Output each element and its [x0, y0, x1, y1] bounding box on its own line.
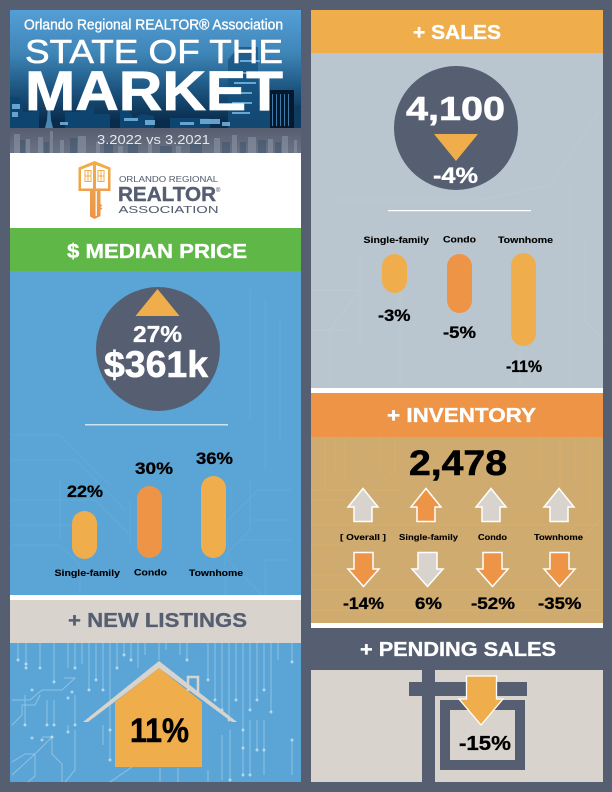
panel: new listings	[10, 600, 301, 782]
inventory type labels: [ Overall ]	[340, 532, 386, 542]
inventory heading: + INVENTORY	[387, 405, 537, 427]
inventory percent values: 6%	[415, 595, 442, 613]
median price heading	[10, 228, 301, 271]
pending sales heading: + PENDING SALES	[360, 639, 556, 661]
bar chart: sales by type: -11%	[506, 357, 542, 376]
percent change: 27%	[133, 321, 182, 347]
inventory percent values: -35%	[538, 595, 582, 613]
bar chart: sales by type: Single-family	[364, 235, 430, 246]
bar chart: median price by type: Condo	[134, 568, 167, 578]
bar chart: median price by type: Single-family	[54, 568, 121, 579]
inventory value: 2,478	[409, 444, 507, 483]
bar chart: sales by type: -5%	[443, 323, 476, 342]
sales percent change: -4%	[433, 163, 478, 188]
icon: house with new listings value: 11%	[130, 712, 189, 750]
logo wordmark: REALTOR	[118, 183, 216, 206]
median price heading: $ MEDIAN PRICE	[67, 241, 247, 263]
icon: down arrows	[348, 552, 575, 586]
sales background	[311, 53, 603, 388]
city skyline	[10, 47, 301, 128]
inventory percent values: -52%	[471, 595, 515, 613]
inventory type labels: Single-family	[399, 532, 458, 542]
inventory percent values	[343, 595, 582, 613]
bar chart: sales by type: -3%	[378, 306, 410, 325]
bar chart: sales by type: Townhome	[498, 235, 553, 246]
bar chart: median price by type	[54, 449, 243, 579]
logo panel	[10, 153, 301, 228]
inventory background	[311, 437, 603, 623]
icon: up arrows	[348, 488, 574, 522]
pending panels	[311, 670, 603, 782]
new listings heading	[10, 600, 301, 643]
header banner: State of the Market	[10, 10, 301, 153]
bar chart: sales by type	[364, 234, 553, 376]
median price value: $361k	[104, 344, 208, 385]
logo wordmark: ORLANDO REGIONAL	[119, 174, 218, 184]
reflection strip	[10, 128, 301, 153]
panel: inventory	[311, 393, 603, 623]
new listings heading: + NEW LISTINGS	[68, 610, 247, 632]
bar chart: median price by type: 36%	[196, 449, 233, 468]
logo wordmark: ASSOCIATION	[118, 204, 218, 216]
up triangle	[136, 289, 180, 316]
header association line: Orlando Regional REALTOR® Association	[24, 18, 283, 34]
inventory percent values: -14%	[343, 595, 384, 613]
bar chart: median price by type: 30%	[135, 459, 173, 478]
bar chart: median price by type: Townhome	[189, 568, 243, 579]
panel: pending sales	[311, 639, 603, 782]
sales value: 4,100	[406, 90, 505, 127]
new listings background	[10, 643, 301, 782]
date comparison: 3.2022 vs 3.2021	[97, 132, 210, 147]
panel: median price	[10, 228, 301, 595]
icon: for sale sign	[409, 682, 527, 770]
median price background	[10, 271, 301, 595]
down triangle	[434, 134, 478, 161]
icon: house with new listings value	[83, 661, 237, 767]
sales stat circle	[394, 66, 518, 190]
inventory heading	[311, 393, 603, 437]
sales heading: + SALES	[413, 22, 501, 44]
MARKET: MARKET	[25, 59, 283, 122]
inventory type labels: Townhome	[534, 532, 583, 542]
key icon	[78, 161, 110, 219]
icon: down arrow	[459, 676, 503, 725]
logo wordmark: ®	[216, 187, 221, 194]
logo wordmark	[118, 174, 221, 216]
inventory type labels: Condo	[478, 532, 507, 542]
inventory type labels	[340, 532, 583, 542]
panel: sales	[311, 10, 603, 388]
sales heading	[311, 10, 603, 53]
STATE OF THE: STATE OF THE	[25, 33, 283, 70]
bar chart: median price by type: 22%	[67, 482, 103, 501]
pending sales value: -15%	[459, 733, 511, 755]
main stat circle	[96, 287, 220, 411]
bar chart: sales by type: Condo	[443, 234, 476, 246]
